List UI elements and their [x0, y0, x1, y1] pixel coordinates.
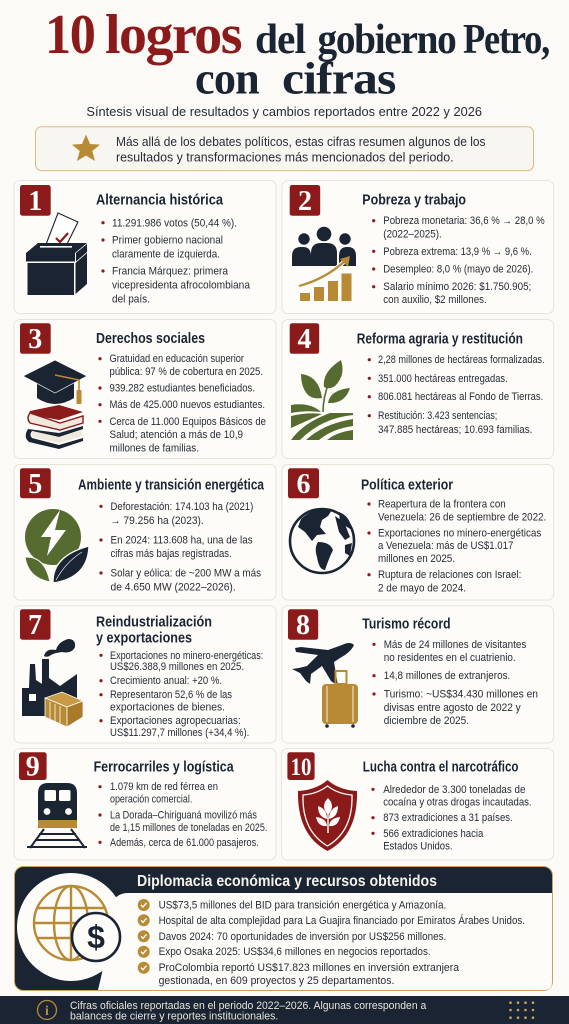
- icon: star: [72, 134, 100, 161]
- bullets: Representaron 52,6 % de las: [110, 689, 232, 701]
- icon: shield with plant: [298, 780, 357, 851]
- icon: globe with dollar coin: [34, 886, 120, 961]
- bullets: del país.: [112, 294, 150, 306]
- bullets: Estados Unidos.: [383, 840, 452, 852]
- bullets: [98, 353, 266, 454]
- badge 10: 10: [290, 754, 312, 781]
- bullets: La Dorada–Chiriguaná movilizó más: [110, 810, 257, 822]
- intro callout: [36, 127, 534, 171]
- badge 1: [20, 185, 51, 217]
- bullets: cocaína y otras drogas incautadas.: [383, 796, 532, 808]
- heading: Reindustrialización: [96, 615, 212, 631]
- panel: 2 Pobreza y trabajo: [282, 180, 554, 314]
- bullets: exportaciones de bienes.: [110, 702, 225, 714]
- icon: info: i: [45, 1004, 49, 1019]
- heading: [96, 615, 212, 647]
- bullets: En 2024: 113.608 ha, una de las: [110, 534, 253, 546]
- badge 2: 2: [298, 186, 312, 217]
- badge 4: [290, 323, 319, 355]
- badge 4: 4: [298, 324, 312, 355]
- bullets: [372, 215, 545, 306]
- checklist: Expo Osaka 2025: US$34,6 millones en negocios reportados.: [159, 946, 431, 958]
- badge 9: 9: [26, 752, 40, 782]
- bullets: millones de familias.: [110, 442, 199, 454]
- bullets: [368, 354, 545, 436]
- badge 8: [288, 609, 318, 641]
- badge 3: 3: [28, 324, 42, 355]
- panel: 1 Alternancia histórica: [14, 180, 276, 314]
- icon: info: [38, 1000, 56, 1020]
- bullets: con auxilio, $2 millones.: [383, 294, 487, 306]
- bullets: de 1,15 millones de toneladas en 2025.: [110, 822, 267, 834]
- icon: graduation cap and books: [23, 360, 87, 449]
- panel: 9 Ferrocarriles y logística: [14, 748, 276, 860]
- checklist: gestionada, en 609 proyectos y 25 departamentos.: [159, 975, 394, 987]
- badge 8: 8: [296, 610, 310, 641]
- bullets: US$26.388,9 millones en 2025.: [110, 661, 244, 673]
- bullets: [99, 650, 263, 739]
- icon: ballot box: [26, 213, 87, 295]
- bullets: claramente de izquierda.: [112, 248, 220, 260]
- bullets: Exportaciones no minero-energéticas: [378, 528, 542, 540]
- checklist: [138, 899, 525, 987]
- bullets: 806.081 hectáreas al Fondo de Tierras.: [378, 391, 543, 403]
- bullets: Además, cerca de 61.000 pasajeros.: [110, 837, 259, 849]
- bullets: Gratuidad en educación superior: [110, 353, 244, 365]
- bullets: operación comercial.: [110, 794, 192, 806]
- bullets: [371, 784, 532, 852]
- heading: Política exterior: [361, 477, 453, 493]
- bullets: [98, 781, 267, 849]
- heading: Ferrocarriles y logística: [94, 760, 234, 776]
- icon: plant and field: [291, 360, 353, 440]
- footer note: balances de cierre y reportes institucionales.: [70, 1010, 278, 1022]
- bullets: Exportaciones no minero-energéticas:: [110, 650, 263, 662]
- bullets: 1.079 km de red férrea en: [110, 781, 218, 793]
- bullets: (2022–2025).: [383, 228, 442, 240]
- badge 9: [19, 752, 47, 782]
- icon: energy leaf: [25, 509, 89, 583]
- bullets: Salud; atención a más de 10,9: [110, 429, 243, 441]
- bullets: [367, 498, 546, 594]
- bullets: Restitución: 3.423 sentencias;: [378, 410, 497, 422]
- footer note: [70, 1000, 427, 1022]
- panel: diplomacia económica: [14, 866, 552, 990]
- panel: 4 Reforma agraria y restitución: [282, 320, 554, 458]
- bullets: no residentes en el cuatrienio.: [384, 652, 516, 664]
- bullets: Alrededor de 3.300 toneladas de: [383, 784, 525, 796]
- title: cifras: [282, 52, 396, 104]
- checklist: ProColombia reportó US$17.823 millones en inversión extranjera: [159, 962, 460, 974]
- bullets: pública: 97 % de cobertura en 2025.: [110, 366, 263, 378]
- bullets: Pobreza extrema: 13,9 % → 9,6 %.: [383, 246, 532, 258]
- title: gobierno: [318, 17, 456, 63]
- bullets: 939.282 estudiantes beneficiados.: [110, 382, 255, 394]
- panel: 10 Lucha contra el narcotráfico: [282, 748, 554, 860]
- badge 5: [20, 468, 51, 500]
- bullets: vicepresidenta afrocolombiana: [112, 280, 251, 292]
- bullets: US$11.297,7 millones (+34,4 %).: [110, 727, 249, 739]
- icon: people and growth: [292, 227, 356, 301]
- bullets: Francia Márquez: primera: [112, 266, 229, 278]
- badge 7: 7: [28, 610, 42, 641]
- checklist: US$73,5 millones del BID para transición energética y Amazonía.: [159, 900, 446, 912]
- heading: Reforma agraria y restitución: [357, 331, 523, 347]
- bullets: 347.885 hectáreas; 10.693 familias.: [378, 424, 532, 436]
- bullets: Más de 24 millones de visitantes: [384, 639, 527, 651]
- bullets: Exportaciones agropecuarias:: [110, 715, 241, 727]
- title: del: [255, 17, 305, 63]
- title: [45, 4, 549, 104]
- bullets: de 4.650 MW (2022–2026).: [110, 582, 236, 594]
- heading: Lucha contra el narcotráfico: [363, 760, 519, 776]
- icon: plane and suitcase: [292, 643, 358, 728]
- bullets: divisas entre agosto de 2022 y: [384, 702, 521, 714]
- bullets: Pobreza monetaria: 36,6 % → 28,0 %: [383, 215, 545, 227]
- heading: Ambiente y transición energética: [78, 477, 265, 493]
- bullets: cifras más bajas registradas.: [110, 548, 232, 560]
- title: Petro,: [463, 17, 549, 63]
- bullets: Cerca de 11.000 Equipos Básicos de: [110, 416, 266, 428]
- bullets: Salario mínimo 2026: $1.750.905;: [383, 281, 531, 293]
- decorative dots: [509, 1001, 534, 1019]
- badge 1: 1: [28, 186, 42, 217]
- bullets: [101, 218, 251, 306]
- checklist: Hospital de alta complejidad para La Guajira financiado por Emiratos Árabes Unidos.: [159, 914, 525, 927]
- badge 3: [20, 323, 51, 355]
- callout text: [116, 135, 486, 164]
- heading: Turismo récord: [362, 616, 450, 632]
- bullets: millones en 2025.: [378, 553, 455, 565]
- badge 6: 6: [296, 469, 310, 500]
- footer note: Cifras oficiales reportadas en el periodo 2022–2026. Algunas corresponden a: [70, 1000, 427, 1012]
- badge 7: [20, 609, 50, 641]
- badge 6: [288, 468, 319, 500]
- bullets: Crecimiento anual: +20 %.: [110, 675, 222, 687]
- bullets: Deforestación: 174.103 ha (2021): [110, 501, 253, 513]
- bullets: 566 extradiciones hacia: [383, 828, 484, 840]
- bullets: diciembre de 2025.: [384, 715, 469, 727]
- bullets: 2 de mayo de 2024.: [378, 582, 466, 594]
- icon: train: [27, 783, 87, 848]
- bullets: → 79.256 ha (2023).: [110, 515, 204, 527]
- bullets: Turismo: ~US$34.430 millones en: [384, 688, 538, 700]
- heading: Alternancia histórica: [96, 192, 224, 208]
- bullets: Desempleo: 8,0 % (mayo de 2026).: [383, 264, 533, 276]
- heading: Diplomacia económica y recursos obtenidos: [137, 873, 437, 890]
- bullets: a Venezuela: más de US$1.017: [378, 540, 513, 552]
- bullets: 873 extradiciones a 31 países.: [383, 812, 513, 824]
- icon: globe: [290, 509, 354, 573]
- bullets: Solar y eólica: de ~200 MW a más: [110, 568, 261, 580]
- heading: Pobreza y trabajo: [362, 192, 466, 208]
- footer: [0, 996, 569, 1024]
- bullets: 14,8 millones de extranjeros.: [384, 670, 510, 682]
- panel: 3 Derechos sociales: [14, 320, 276, 458]
- panel: 5 Ambiente y transición energética: [14, 464, 276, 600]
- bullets: Primer gobierno nacional: [112, 234, 223, 246]
- bullets: [99, 501, 261, 594]
- callout text: resultados y transformaciones más mencionados del periodo.: [116, 150, 454, 164]
- bullets: Más de 425.000 nuevos estudiantes.: [110, 399, 265, 411]
- bullets: 11.291.986 votos (50,44 %).: [112, 218, 237, 230]
- checklist: Davos 2024: 70 oportunidades de inversión por US$256 millones.: [159, 931, 446, 943]
- icon: factory and box: [22, 639, 83, 727]
- bullets: Reapertura de la frontera con: [378, 498, 506, 510]
- panel: 7 Reindustrialización y exportaciones: [14, 606, 276, 743]
- bullets: [372, 639, 538, 727]
- badge 2: [290, 185, 320, 217]
- callout text: Más allá de los debates políticos, estas cifras resumen algunos de los: [116, 135, 486, 149]
- icon: globe with dollar coin: $: [87, 919, 105, 955]
- badge 5: 5: [28, 469, 42, 500]
- bullets: Venezuela: 26 de septiembre de 2022.: [378, 512, 546, 524]
- title: logros: [105, 4, 242, 66]
- bullets: 351.000 hectáreas entregadas.: [378, 373, 508, 385]
- heading: Derechos sociales: [96, 331, 205, 347]
- panel: 8 Turismo récord: [282, 606, 554, 743]
- bullets: Ruptura de relaciones con Israel:: [378, 569, 521, 581]
- panel: 6 Política exterior: [282, 464, 554, 600]
- heading: y exportaciones: [96, 631, 192, 647]
- subtitle: Síntesis visual de resultados y cambios reportados entre 2022 y 2026: [86, 104, 482, 119]
- title: 10: [45, 4, 94, 66]
- title: con: [195, 52, 259, 104]
